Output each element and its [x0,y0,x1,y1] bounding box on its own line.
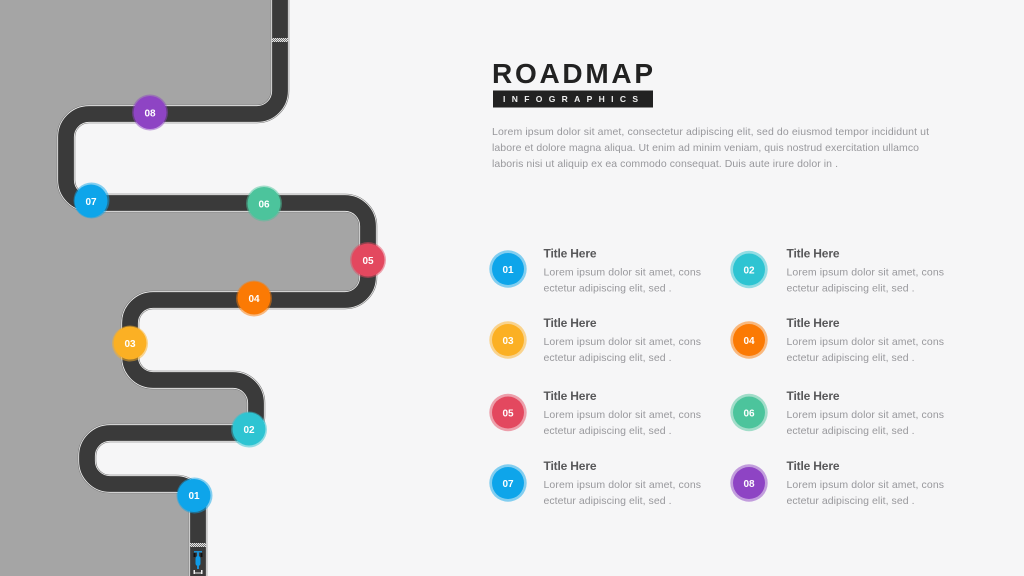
list item 07: Lorem ipsum dolor sit amet, cons [544,479,701,491]
list item 03: Lorem ipsum dolor sit amet, cons [544,336,701,348]
list item 06: Lorem ipsum dolor sit amet, cons [786,409,944,421]
list item 04: ectetur adipiscing elit, sed . [786,352,914,364]
road marker 03: 03 [124,339,136,350]
winding road [66,0,368,576]
list item 05: Title Here [544,389,597,403]
list item 05: 05 [502,408,514,420]
gray land area [0,0,368,576]
road marker 04: 04 [248,294,260,305]
list item 01: Title Here [544,246,597,260]
road marker 08 [132,94,168,130]
list item 05 [489,389,701,437]
list item 02 [730,246,944,294]
road marker 06 [246,186,282,222]
list item 02: Lorem ipsum dolor sit amet, cons [786,266,944,278]
road marker 03 [112,326,148,362]
list item 03: 03 [502,336,514,347]
road marker 02 [231,412,267,448]
list item 02: 02 [743,266,755,276]
list item 04: Lorem ipsum dolor sit amet, cons [786,336,944,348]
road marker 05: 05 [362,256,374,267]
road marker 01: 01 [188,491,200,502]
road marker 04 [236,280,272,316]
road marker 07: 07 [85,197,97,208]
intro paragraph: Lorem ipsum dolor sit amet, consectetur adipiscing elit, sed do eiusmod tempor incididunt ut [492,126,929,138]
road marker 06: 06 [258,200,270,210]
intro paragraph: labore et dolore magna aliqua. Ut enim ad minim veniam, quis nostrud exercitation ullamco [492,142,919,154]
subtitle banner: INFOGRAPHICS [503,94,638,104]
list item 05: ectetur adipiscing elit, sed . [544,425,672,437]
finish line [272,38,288,42]
road marker 01 [176,478,212,514]
list item 01: Lorem ipsum dolor sit amet, cons [544,266,701,278]
list item 01: ectetur adipiscing elit, sed . [544,282,672,294]
list item 06 [730,389,944,437]
list item 03 [489,316,701,364]
intro paragraph [492,126,929,170]
list item 04 [730,316,944,364]
road marker 08: 08 [144,108,156,120]
list item 02: Title Here [786,246,840,260]
road marker 05 [350,242,386,278]
list item 06: ectetur adipiscing elit, sed . [786,425,914,437]
road marker 07 [74,182,110,218]
icon: race car [194,551,202,574]
intro paragraph: laboris nisi ut aliquip ex ea commodo consequat. Duis aute irure dolor in . [492,158,838,170]
list item 08: Title Here [786,459,840,473]
title: ROADMAP [492,58,653,89]
list item 08 [730,459,944,507]
list item 08: ectetur adipiscing elit, sed . [786,495,914,507]
road marker 02: 02 [243,425,255,436]
list item 01 [489,246,701,294]
list item 02: ectetur adipiscing elit, sed . [786,282,914,294]
list item 07: Title Here [544,459,597,473]
subtitle banner [493,90,653,108]
list item 07 [489,459,701,507]
list item 04: 04 [743,336,755,347]
list item 07: ectetur adipiscing elit, sed . [544,495,672,507]
list item 03: Title Here [544,316,597,330]
list item 08: Lorem ipsum dolor sit amet, cons [786,479,944,491]
list item 06: 06 [743,408,755,420]
list item 03: ectetur adipiscing elit, sed . [544,352,672,364]
list item 04: Title Here [786,316,840,330]
list item 01: 01 [502,265,514,276]
list item 07: 07 [502,479,514,490]
list item 08: 08 [743,479,755,490]
start line [190,543,206,547]
list item 06: Title Here [786,389,840,403]
list item 05: Lorem ipsum dolor sit amet, cons [544,409,701,421]
